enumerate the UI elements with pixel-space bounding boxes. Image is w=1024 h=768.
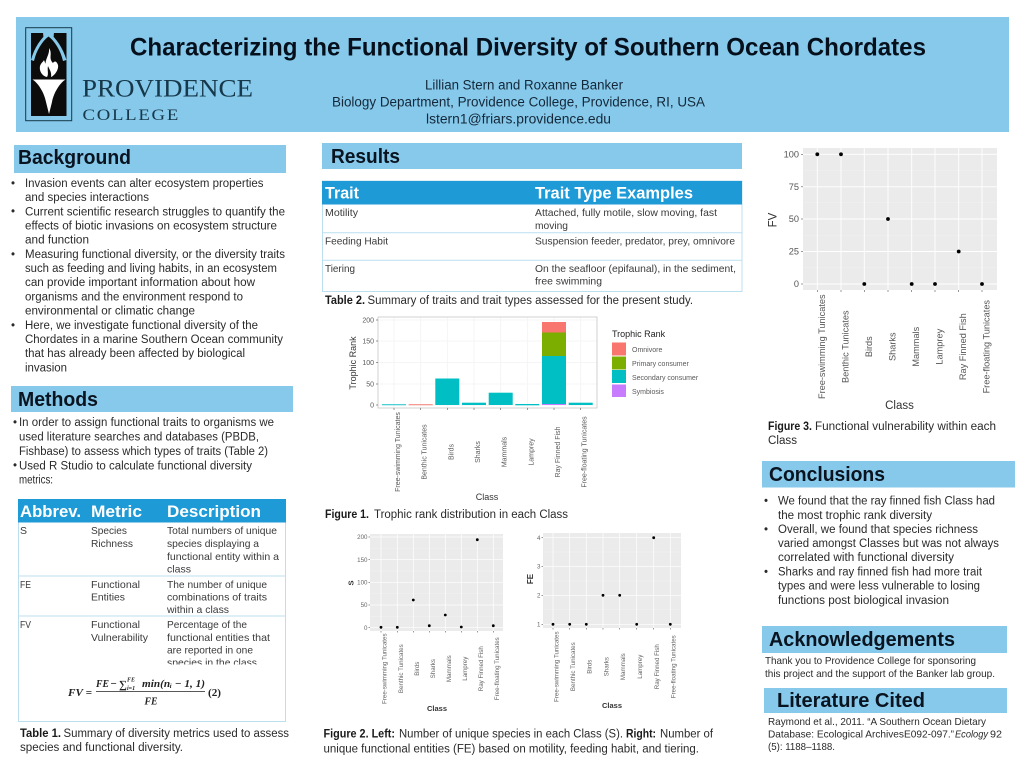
figure 3 caption: Figure 3.	[768, 421, 812, 433]
chart: figure 2 left species count: Class	[427, 704, 447, 713]
figure 2 caption: Right:	[626, 728, 656, 740]
background bullet list: •	[11, 178, 15, 190]
figure 2 caption: Number of	[660, 728, 714, 740]
chart: figure 1 trophic rank stacked bars: Class	[476, 492, 499, 502]
chart: figure 2 right functional entities: FE	[526, 573, 535, 584]
table 1: diversity metrics: species in the class	[167, 657, 257, 669]
chart: figure 2 left species count: Ray Finned Fish	[478, 646, 485, 691]
background bullet list: •	[11, 320, 15, 332]
conclusions bullet list: •	[764, 496, 768, 508]
table 2: traits: Attached, fully motile, slow moving, fast	[535, 207, 717, 219]
background bullet list: Invasion events can alter ecosystem properties	[25, 178, 264, 190]
table 1: diversity metrics: Entities	[91, 592, 125, 604]
table 2: traits: Feeding Habit	[325, 236, 388, 248]
table 1 caption: Summary of diversity metrics used to assess	[64, 728, 289, 740]
chart: figure 2 left species count: Birds	[414, 662, 421, 676]
panel: results	[322, 143, 742, 756]
legend: trophic rank: Symbiosis	[632, 389, 664, 396]
chart: figure 1 trophic rank stacked bars: 50	[366, 382, 374, 388]
chart: figure 3 functional vulnerability: Free-swimming Tunicates	[817, 294, 827, 399]
chart: figure 3 functional vulnerability: Ray Finned Fish	[958, 313, 968, 380]
table 2: traits	[322, 181, 742, 292]
heading: literature cited: Literature Cited	[777, 690, 925, 712]
chart: figure 2 right functional entities: Ray Finned Fish	[654, 644, 661, 689]
table 1: diversity metrics: Percentage of the	[167, 619, 247, 631]
chart: figure 2 right functional entities: 2	[537, 592, 541, 600]
title: Characterizing the Functional Diversity of Southern Ocean Chordates	[130, 34, 926, 62]
panel: background	[11, 145, 286, 374]
chart: figure 1 trophic rank stacked bars: Free-floating Tunicates	[582, 416, 589, 488]
methods bullet list: metrics:	[19, 474, 53, 486]
logo: Providence College: COLLEGE	[82, 107, 180, 124]
conclusions bullet list: functions post biological invasion	[778, 595, 949, 607]
table 1: diversity metrics: Functional	[91, 619, 140, 631]
chart: figure 2 left species count: 200	[357, 534, 368, 541]
conclusions bullet list: varied amongst Classes but was not always	[778, 538, 999, 550]
heading: literature cited	[764, 688, 1007, 713]
chart: figure 2 left species count: 50	[361, 602, 368, 609]
chart: figure 3 functional vulnerability: 100	[784, 150, 799, 160]
chart: figure 2 right functional entities: Free-swimming Tunicates	[553, 631, 560, 702]
panel: acknowledgements	[762, 626, 1007, 680]
chart: figure 2 right functional entities: 3	[537, 564, 541, 570]
figure 3 caption: Class	[768, 435, 797, 447]
acknowledgements text: Thank you to Providence College for sponsoring	[765, 655, 976, 667]
chart: figure 2 right functional entities: Free-floating Tunicates	[671, 635, 678, 698]
chart: figure 1 trophic rank stacked bars: Lamprey	[528, 438, 535, 466]
chart: figure 1 trophic rank stacked bars: 100	[362, 360, 374, 367]
chart: figure 1 trophic rank stacked bars: Ray Finned Fish	[555, 426, 562, 477]
chart: figure 2 left species count: 100	[357, 579, 368, 586]
methods bullet list: Used R Studio to calculate functional diversity	[19, 460, 252, 472]
chart: figure 2 right functional entities: Class	[602, 701, 622, 710]
conclusions bullet list: the most trophic rank diversity	[778, 510, 932, 522]
background bullet list	[11, 178, 285, 374]
chart: figure 3 functional vulnerability: Benthic Tunicates	[840, 310, 850, 383]
methods bullet list: used literature searches and databases (PBDB,	[19, 432, 259, 444]
chart: figure 3 functional vulnerability: Class	[885, 400, 914, 412]
heading: results	[322, 143, 742, 169]
table 1 caption: species and functional diversity.	[20, 742, 183, 754]
heading: methods: Methods	[18, 389, 98, 411]
heading: conclusions	[762, 461, 1015, 488]
citation text: Ecology	[955, 728, 989, 740]
legend: trophic rank	[612, 329, 699, 397]
table 1 caption	[20, 728, 289, 754]
figure 2 caption: Figure 2. Left:	[324, 728, 395, 740]
formula: functional vulnerability: −	[110, 678, 117, 690]
background bullet list: Measuring functional diversity, or the diversity traits	[25, 249, 285, 261]
citation text: Database: Ecological ArchivesE092-097.”	[768, 728, 954, 740]
background bullet list: invasion	[25, 362, 67, 374]
logo: Providence College: PROVIDENCE	[82, 76, 253, 102]
chart: figure 2 left species count: Free-floating Tunicates	[494, 637, 501, 700]
heading: results: Results	[331, 146, 400, 168]
citation text: 92	[990, 728, 1002, 740]
background bullet list: that has already been affected by biological	[25, 348, 245, 360]
formula: functional vulnerability: FE	[95, 678, 109, 690]
citation text	[768, 716, 1002, 753]
formula: functional vulnerability: FV =	[67, 687, 92, 699]
heading: background: Background	[18, 147, 131, 169]
chart: figure 2 right functional entities: Birds	[587, 660, 594, 674]
background bullet list: organisms and the environment respond to	[25, 292, 243, 304]
background bullet list: such as feeding and living habits, in an ecosystem	[25, 263, 277, 275]
table 1: diversity metrics: The number of unique	[167, 579, 267, 591]
chart: figure 3 functional vulnerability: FV	[768, 212, 780, 227]
chart: figure 2 left species count: S	[346, 580, 356, 586]
chart: figure 3 functional vulnerability: Free-floating Tunicates	[982, 300, 992, 393]
table 1: diversity metrics: FE	[20, 579, 31, 591]
figure 2 caption: Number of unique species in each Class (S).	[399, 728, 623, 740]
table 1: diversity metrics: functional entity within a	[167, 551, 279, 563]
acknowledgements text: this project and the support of the Banker lab group.	[765, 668, 995, 680]
chart: figure 1 trophic rank stacked bars: 0	[370, 402, 374, 410]
chart: figure 2 left species count: Sharks	[430, 659, 437, 678]
formula: functional vulnerability: i=1	[127, 686, 135, 692]
table 2: traits: Suspension feeder, predator, prey, omnivore	[535, 236, 735, 248]
table 1: diversity metrics: Functional	[91, 579, 140, 591]
chart: figure 3 functional vulnerability: Lamprey	[934, 328, 944, 365]
chart: figure 3 functional vulnerability: Birds	[864, 336, 874, 357]
background bullet list: can provide important information about how	[25, 277, 256, 289]
figure 2 caption: unique functional entities (FE) based on motility, feeding habit, and tiering.	[324, 744, 699, 756]
panel: literature cited	[764, 688, 1007, 753]
chart: figure 1 trophic rank stacked bars: 200	[362, 318, 374, 324]
chart: figure 2 right functional entities: Mammals	[620, 653, 627, 680]
table 2: traits: Motility	[325, 207, 359, 219]
chart: figure 2 left species count: 150	[357, 557, 368, 564]
table 1: diversity metrics: Metric	[91, 502, 142, 521]
conclusions bullet list: correlated with functional diversity	[778, 552, 954, 564]
chart: figure 2 left species count: Mammals	[446, 655, 453, 682]
conclusions bullet list: We found that the ray finned fish Class had	[778, 496, 995, 508]
authors and affiliation: Lillian Stern and Roxanne Banker	[425, 78, 623, 92]
table 1: diversity metrics: Vulnerability	[91, 632, 149, 644]
table 1 caption: Table 1.	[20, 728, 61, 740]
chart: figure 1 trophic rank stacked bars: Benthic Tunicates	[422, 424, 429, 480]
citation text: (5): 1188–1188.	[768, 741, 835, 753]
legend: trophic rank: Trophic Rank	[612, 329, 666, 339]
figure 3 caption	[768, 421, 996, 447]
methods bullet list: Fishbase) to assess which types of traits (Table 2)	[19, 446, 268, 458]
table 1: diversity metrics: species displaying a	[167, 538, 259, 550]
chart: figure 1 trophic rank stacked bars: Sharks	[475, 441, 482, 463]
table 1: diversity metrics: functional entities that	[167, 632, 270, 644]
methods bullet list	[13, 417, 274, 486]
chart: figure 1 trophic rank stacked bars: Trophic Rank	[348, 336, 358, 390]
chart: figure 2 right functional entities: Sharks	[603, 657, 610, 676]
citation text: Raymond et al., 2011. “A Southern Ocean Dietary	[768, 716, 987, 728]
conclusions bullet list	[764, 496, 999, 607]
table 1: diversity metrics: Abbrev.	[20, 502, 81, 521]
table 2: traits: free swimming	[535, 276, 602, 288]
chart: figure 2 left species count	[346, 534, 503, 713]
chart: figure 3 functional vulnerability: 50	[789, 214, 799, 224]
table 2: traits: On the seafloor (epifaunal), in the sediment,	[535, 263, 736, 275]
chart: figure 3 functional vulnerability: Mammals	[911, 326, 921, 367]
conclusions bullet list: •	[764, 524, 768, 536]
chart: figure 2 right functional entities: 1	[537, 622, 541, 628]
conclusions bullet list: Overall, we found that species richness	[778, 524, 978, 536]
formula: functional vulnerability: (2)	[208, 687, 221, 699]
heading: background	[14, 145, 286, 173]
methods bullet list: •	[13, 417, 17, 429]
chart: figure 3 functional vulnerability: 0	[794, 279, 799, 289]
acknowledgements text	[765, 655, 995, 680]
background bullet list: •	[11, 249, 15, 261]
conclusions bullet list: types and were less vulnerable to losing	[778, 580, 980, 592]
table 1: diversity metrics: combinations of traits	[167, 592, 267, 604]
chart: figure 2 left species count: Lamprey	[462, 656, 469, 681]
background bullet list: effects of biotic invasions on ecosystem structure	[25, 220, 277, 232]
conclusions bullet list: •	[764, 566, 768, 578]
chart: figure 1 trophic rank stacked bars: Free-swimming Tunicates	[395, 412, 402, 492]
chart: figure 1 trophic rank stacked bars: 150	[362, 338, 374, 346]
background bullet list: and function	[25, 234, 89, 246]
background bullet list: and species interactions	[25, 192, 149, 204]
formula: functional vulnerability: FE	[144, 696, 158, 708]
table 1: diversity metrics: FV	[20, 619, 31, 631]
table 1: diversity metrics: Species	[91, 525, 127, 537]
table 2 caption: Table 2.	[325, 295, 365, 307]
table 1: diversity metrics: class	[167, 564, 191, 576]
table 1: diversity metrics: Richness	[91, 538, 133, 550]
table 2: traits: Trait	[325, 184, 359, 202]
chart: figure 3 functional vulnerability	[768, 148, 997, 412]
chart: figure 2 right functional entities	[526, 533, 681, 710]
chart: figure 1 trophic rank stacked bars: Birds	[448, 444, 455, 460]
chart: figure 2 right functional entities: Benthic Tunicates	[570, 642, 577, 691]
chart: figure 2 left species count: 0	[364, 625, 368, 632]
table 1: diversity metrics: Description	[167, 502, 261, 521]
background bullet list: Current scientific research struggles to quantify the	[25, 206, 285, 218]
conclusions bullet list: Sharks and ray finned fish had more trait	[778, 566, 983, 578]
chart: figure 1 trophic rank stacked bars: Mammals	[502, 436, 509, 467]
background bullet list: •	[11, 206, 15, 218]
legend: trophic rank: Primary consumer	[632, 361, 689, 368]
table 1: diversity metrics: within a class	[166, 604, 229, 616]
table 2: traits: Tiering	[325, 263, 355, 275]
chart: figure 2 left species count: Free-swimming Tunicates	[382, 633, 388, 704]
chart: figure 3 functional vulnerability: Sharks	[888, 332, 898, 361]
authors and affiliation: Biology Department, Providence College, Providence, RI, USA	[332, 94, 705, 110]
formula: functional vulnerability: min(nᵢ − 1, 1)	[142, 678, 205, 690]
table 1: diversity metrics: Total numbers of unique	[167, 525, 277, 537]
formula: functional vulnerability: FE	[127, 678, 135, 684]
authors and affiliation: lstern1@friars.providence.edu	[426, 112, 611, 126]
background bullet list: environmental or climatic change	[25, 306, 195, 318]
figure 1 caption: Figure 1.	[325, 509, 369, 521]
formula: functional vulnerability	[67, 678, 221, 708]
table 1: diversity metrics: S	[20, 525, 27, 537]
heading: acknowledgements: Acknowledgements	[769, 629, 955, 651]
methods bullet list: In order to assign functional traits to organisms we	[19, 417, 274, 429]
logo: Providence College	[26, 28, 253, 124]
chart: figure 1 trophic rank stacked bars	[348, 317, 699, 502]
chart: figure 3 functional vulnerability: 75	[789, 182, 799, 192]
header banner	[16, 17, 1009, 132]
table 2: traits: moving	[535, 220, 568, 232]
methods bullet list: •	[13, 460, 17, 472]
table 2: traits: Trait Type Examples	[535, 184, 693, 202]
authors and affiliation	[332, 78, 705, 126]
background bullet list: Here, we investigate functional diversity of the	[25, 320, 258, 332]
chart: figure 2 left species count: Benthic Tunicates	[398, 644, 405, 693]
heading: conclusions: Conclusions	[769, 464, 885, 486]
figure 3 caption: Functional vulnerability within each	[815, 421, 996, 433]
chart: figure 2 right functional entities: Lamprey	[637, 654, 644, 679]
chart: figure 2 right functional entities: 4	[537, 535, 541, 542]
chart: figure 3 functional vulnerability: 25	[789, 247, 799, 257]
heading: methods	[11, 386, 293, 412]
panel: conclusions	[762, 461, 1015, 607]
panel: methods	[11, 386, 293, 754]
heading: acknowledgements	[762, 626, 1007, 653]
legend: trophic rank: Omnivore	[632, 347, 662, 354]
formula: functional vulnerability: ∑	[119, 679, 127, 691]
figure 1 caption: Trophic rank distribution in each Class	[374, 509, 568, 521]
table 2 caption: Summary of traits and trait types assessed for the present study.	[368, 295, 693, 307]
background bullet list: Chordates in a marine Southern Ocean community	[25, 334, 283, 346]
table 1: diversity metrics: are reported in one	[167, 644, 253, 656]
legend: trophic rank: Secondary consumer	[632, 375, 699, 382]
figure 2 caption	[324, 728, 714, 756]
table 1: diversity metrics	[18, 499, 286, 722]
